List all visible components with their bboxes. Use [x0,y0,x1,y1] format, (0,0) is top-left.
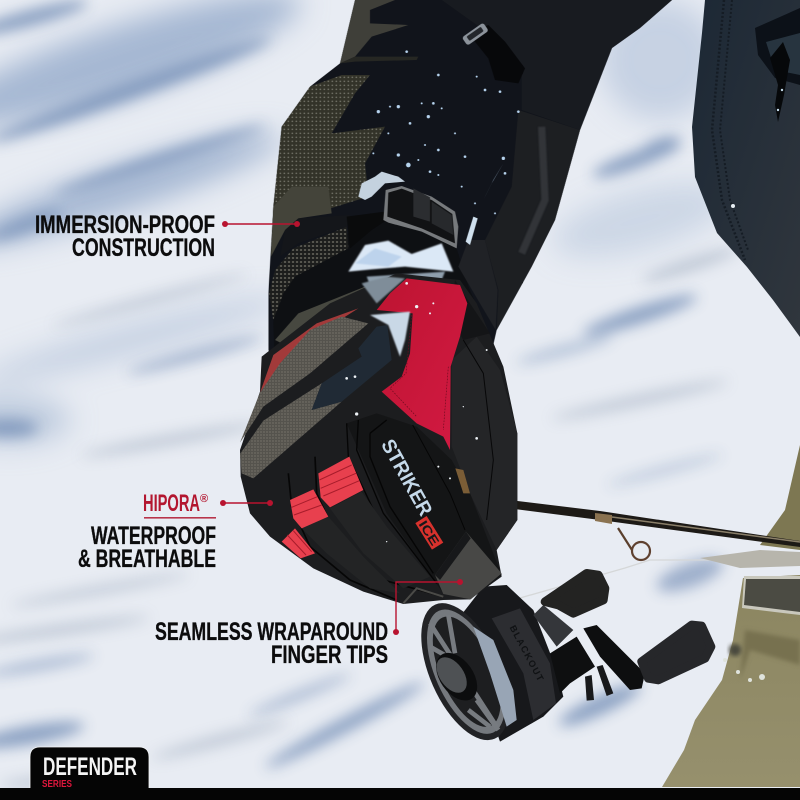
callout: hipora: HIPORA [143,490,200,517]
leader line [393,579,463,635]
gray fingertip [435,532,502,599]
fishing reel [403,573,711,753]
snow on thumb [362,277,410,357]
red back-of-hand strip [260,308,358,393]
sunlit cuff [271,75,385,253]
line spool [473,627,517,727]
finger panels [347,413,502,599]
zipper pull [462,23,525,83]
sunlit shoulder fold [340,0,408,63]
glove body [240,273,517,604]
callout: seamless wraparound finger tips: SEAMLESS WRAPAROUND [155,618,388,646]
callout: immersion-proof construction [35,211,300,262]
khaki trousers [662,445,800,787]
belt [742,576,800,615]
series badge: DEFENDER [43,753,137,781]
callout: seamless wraparound finger tips [155,579,463,669]
leader line [222,221,300,227]
series badge: SERIES [42,778,72,790]
lower cuff shadow [273,213,488,367]
red finger pads [282,457,363,558]
callout: seamless wraparound finger tips: FINGER TIPS [271,641,388,669]
glove [240,273,517,604]
callout: hipora: WATERPROOF [91,522,216,550]
drum [460,585,563,742]
upper sleeve [442,0,672,130]
red leather thumb patch [377,278,467,450]
reel brand: BLACKOUT [508,624,545,683]
brake band [492,608,556,720]
axle [550,637,595,693]
glove rim fabric [275,287,382,347]
snow specks on glove [345,282,488,542]
knuckle fabric bands [240,317,368,443]
callout: immersion-proof construction: CONSTRUCTION [72,234,215,262]
brand: ICE: ICE [416,518,442,548]
flange [403,590,527,753]
buckle [383,186,458,248]
cuff seam [340,57,418,63]
finger fabric [330,492,430,588]
leader line [220,500,273,506]
callout: hipora: ® [200,493,208,505]
right trouser leg [692,0,800,337]
sleeve [268,0,672,367]
fishing rod [462,495,800,612]
callout: hipora: & BREATHABLE [78,545,216,573]
dark cuff shade [280,215,350,257]
right arm panel [485,110,580,330]
callout: immersion-proof construction: IMMERSION-PROOF [35,211,215,239]
brand: ICE [415,516,443,550]
knuckle guard [312,325,392,410]
brand: STRIKER: STRIKER [376,436,437,520]
snow on wrist [348,241,453,298]
pocket zipper [731,8,800,208]
series badge [0,747,800,800]
brown rod butt [455,468,470,493]
mesh strap [269,227,348,320]
fingertip seam [403,588,443,603]
callout: hipora [78,490,273,573]
reel handles [533,573,711,701]
footer bar [0,788,800,800]
snow specks on sleeve [358,50,520,245]
